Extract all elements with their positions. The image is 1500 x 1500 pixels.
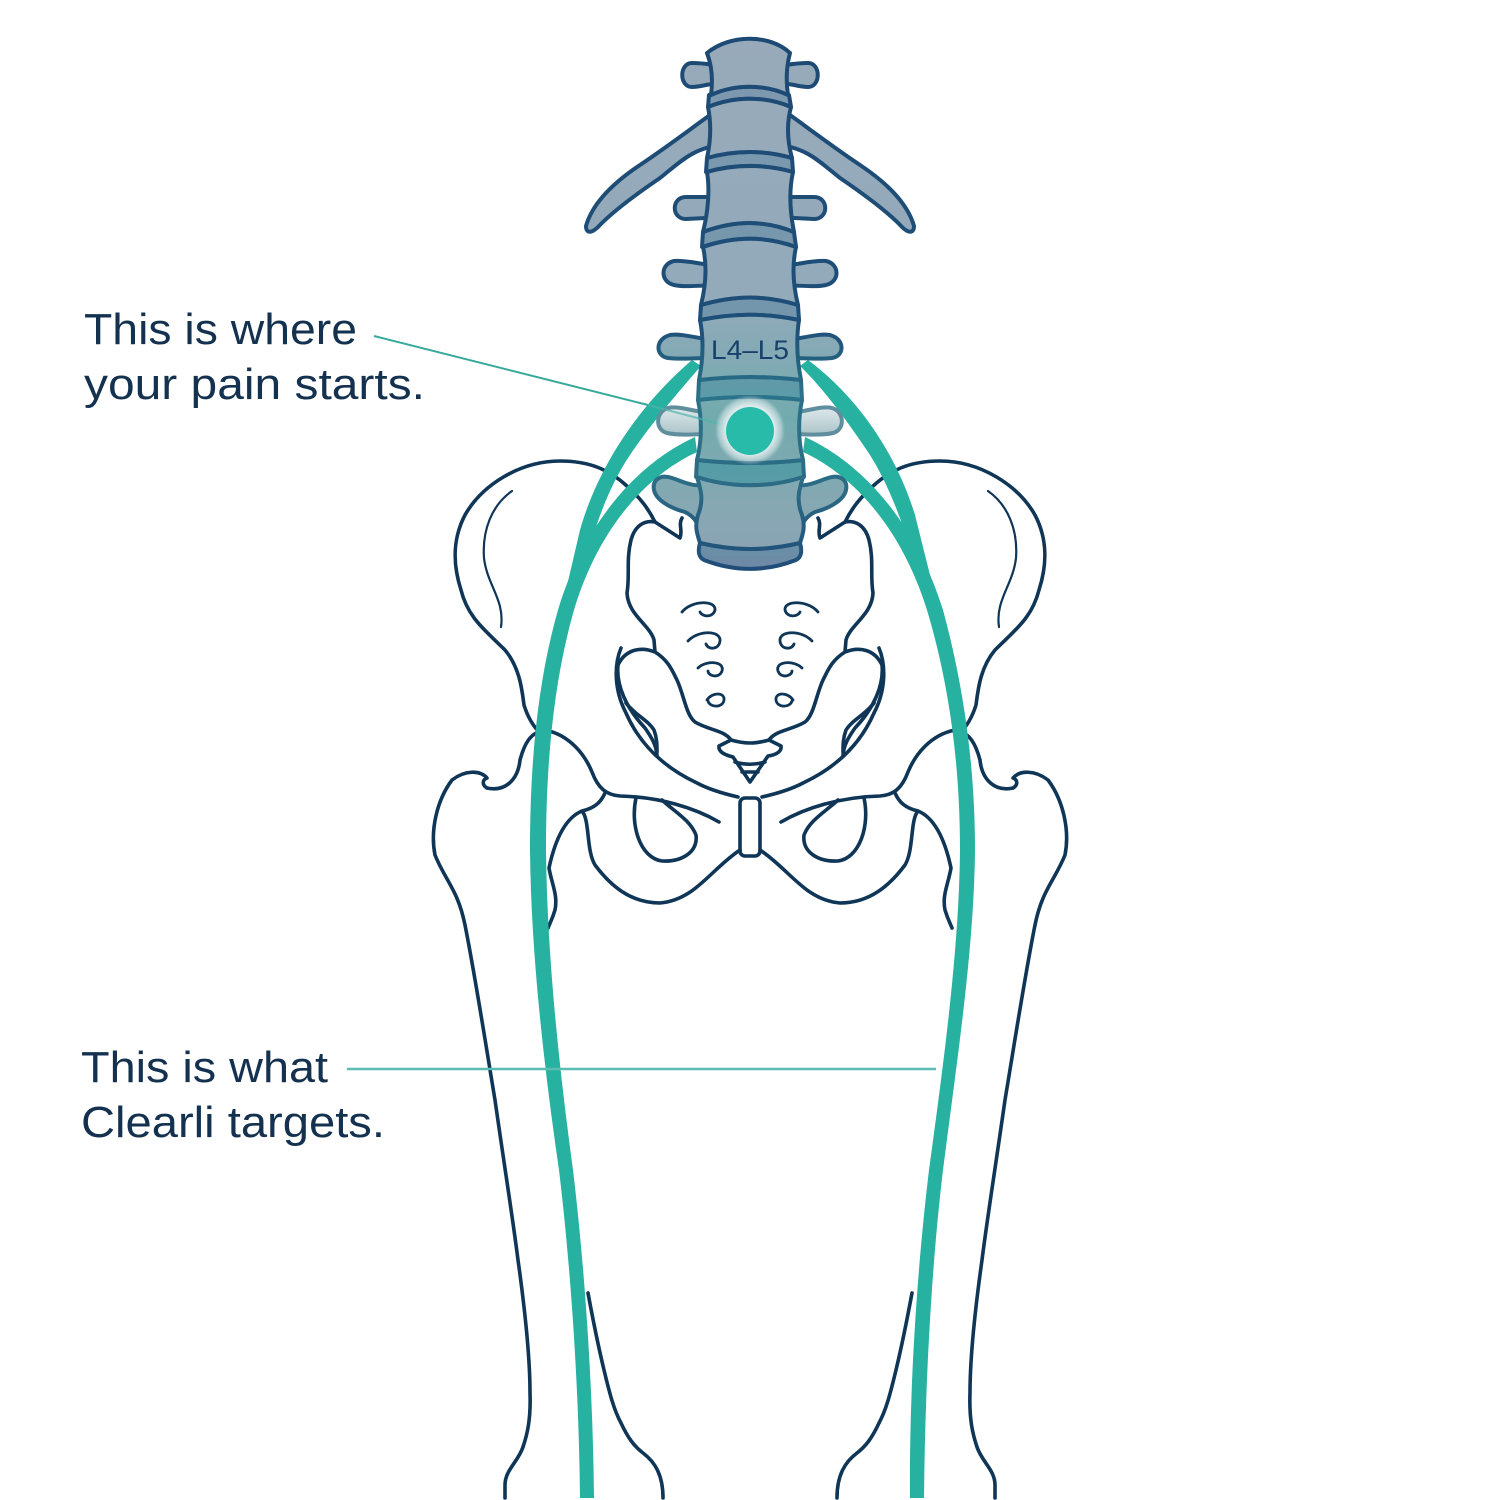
femoral head joint left: [487, 730, 719, 822]
lumbar spine: [586, 39, 914, 569]
faded processes at L5 level: [658, 407, 720, 435]
obturator foramina: [634, 798, 696, 861]
upper wings: [586, 104, 725, 232]
vertebral bodies: [707, 39, 790, 95]
callout text: where pain starts: your pain starts.: [84, 360, 425, 409]
pelvic brim arcs: [616, 648, 738, 797]
right femur outer and inner: [970, 772, 1067, 1498]
sciatic nerves: [530, 360, 975, 1498]
sacrum: [618, 518, 731, 755]
left main nerve: [530, 437, 697, 1498]
transverse processes: [682, 63, 725, 87]
callout text: what Clearli targets: Clearli targets.: [81, 1098, 385, 1147]
pubic symphysis: [740, 798, 760, 856]
pelvis and femur bones: [433, 461, 1067, 1498]
pain point marker: [715, 395, 785, 465]
callout text: what Clearli targets: [81, 1043, 385, 1147]
right ilium: [845, 461, 1045, 733]
left upper nerve branch: [566, 360, 701, 590]
callout text: where pain starts: [84, 305, 425, 409]
femoral head joint right: [781, 730, 1013, 822]
right upper nerve branch: [800, 360, 935, 595]
lower pubic rami: [548, 793, 740, 928]
callout text: what Clearli targets: This is what: [81, 1043, 328, 1092]
lower wing processes: [654, 477, 720, 530]
label: L4-L5: L4–L5: [711, 335, 789, 365]
right main nerve: [803, 437, 975, 1498]
callout leader: pain starts: [374, 336, 728, 426]
callout text: where pain starts: This is where: [84, 305, 357, 354]
callout leader: Clearli targets: [347, 1068, 936, 1070]
left ilium: [455, 461, 655, 733]
coccyx: [719, 740, 781, 782]
sacral foramina: [682, 603, 818, 706]
left femur outer and inner: [433, 772, 530, 1498]
intervertebral discs: [696, 87, 804, 569]
iliac fossa curves: [484, 491, 512, 627]
